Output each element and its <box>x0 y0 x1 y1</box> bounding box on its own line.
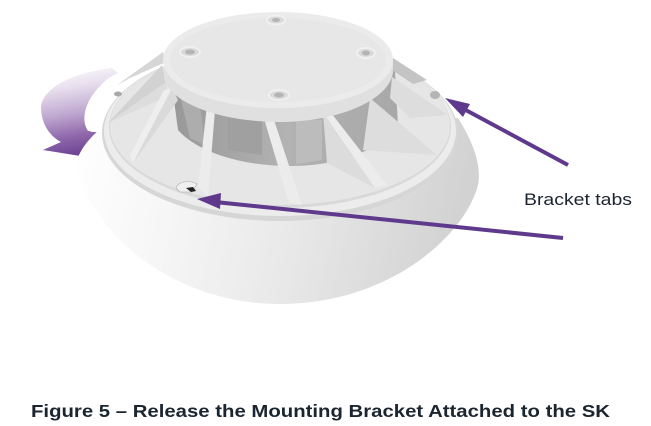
bracket ribs <box>108 52 448 205</box>
white highlight beside rim <box>85 72 122 132</box>
arrow: upper bracket tab pointer <box>445 98 568 165</box>
central cylinder <box>172 70 398 166</box>
label: bracket tabs: Bracket tabs <box>524 190 632 209</box>
small hole and tabs <box>114 92 122 96</box>
mounting disc <box>164 60 393 122</box>
dome body <box>76 118 479 304</box>
caption: Figure 5 – Release the Mounting Bracket Attached to the SK <box>31 401 610 421</box>
device: smoke sensor base with bracket <box>76 12 479 304</box>
bracket plate outer rim <box>102 45 458 221</box>
arrow: lower bracket tab pointer <box>197 193 563 238</box>
disc screw bosses <box>180 16 375 100</box>
icon: purple rotation arrow <box>41 68 118 158</box>
